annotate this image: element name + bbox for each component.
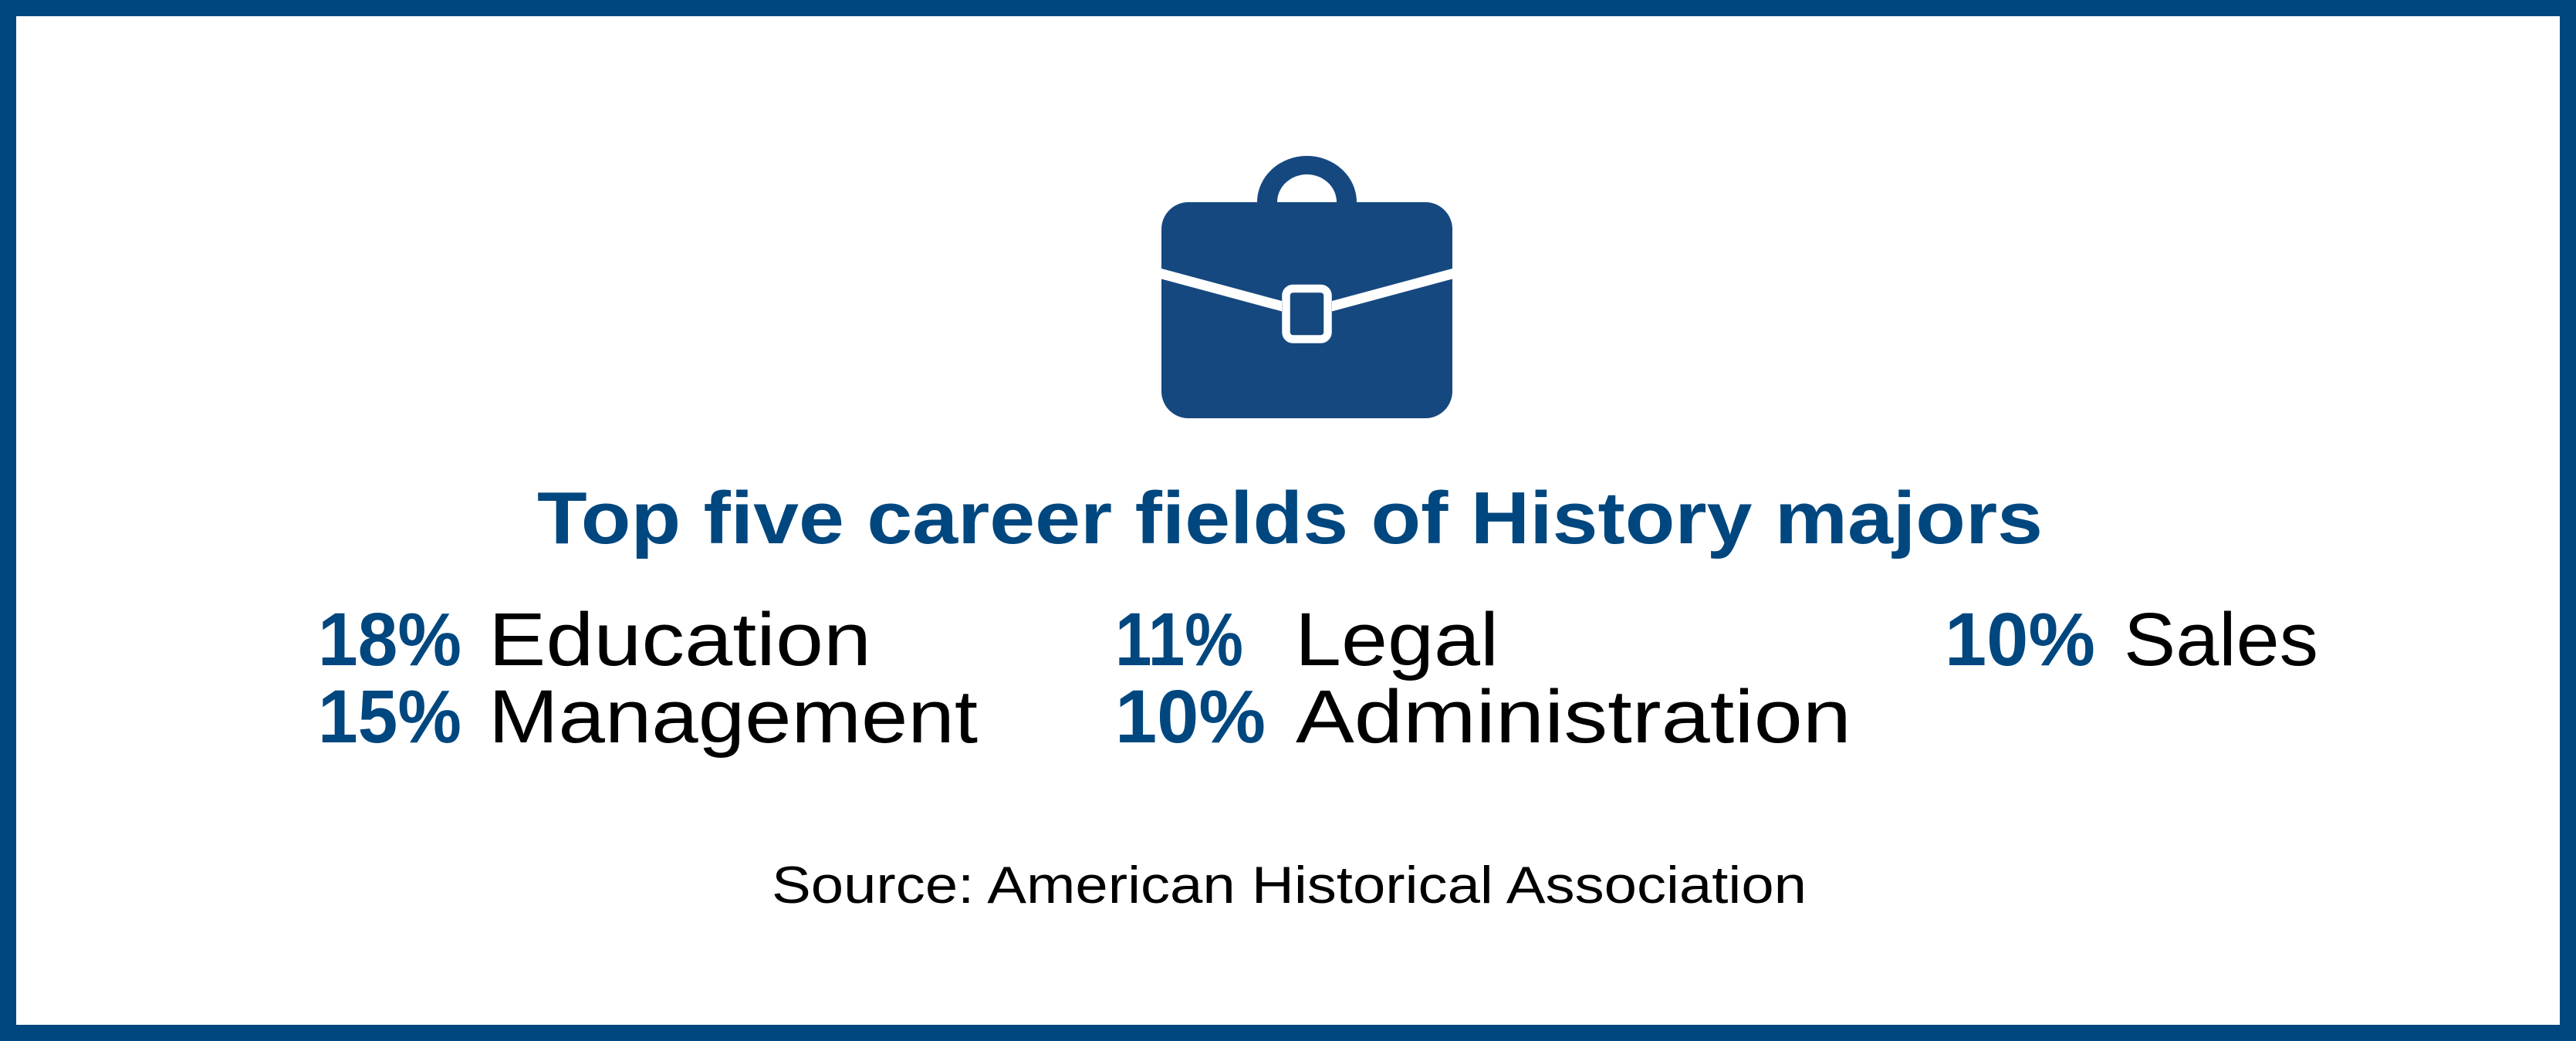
stat: 18% Education: 18% xyxy=(318,597,461,681)
icon: briefcase xyxy=(1161,156,1452,418)
stat: 10% Sales: 10% xyxy=(1945,597,2095,681)
stat: 15% Management xyxy=(318,674,978,759)
stat: 15% Management: 15% xyxy=(318,674,461,759)
stat: 11% Legal xyxy=(1115,597,1499,681)
stat: 18% Education xyxy=(318,597,871,681)
stat: 10% Administration: 10% xyxy=(1115,674,1266,759)
stat: 11% Legal: Legal xyxy=(1295,597,1499,681)
stat: 18% Education: Education xyxy=(488,597,871,681)
stat: 10% Sales xyxy=(1945,597,2318,681)
stat: 10% Administration xyxy=(1115,674,1851,759)
title: Top five career fields of History majors xyxy=(537,477,2043,559)
source note: Source: American Historical Association xyxy=(772,856,1807,914)
stat: 10% Administration: Administration xyxy=(1296,674,1851,759)
stat: 15% Management: Management xyxy=(488,674,978,759)
stat: 10% Sales: Sales xyxy=(2124,597,2318,681)
stat: 11% Legal: 11% xyxy=(1115,597,1243,681)
